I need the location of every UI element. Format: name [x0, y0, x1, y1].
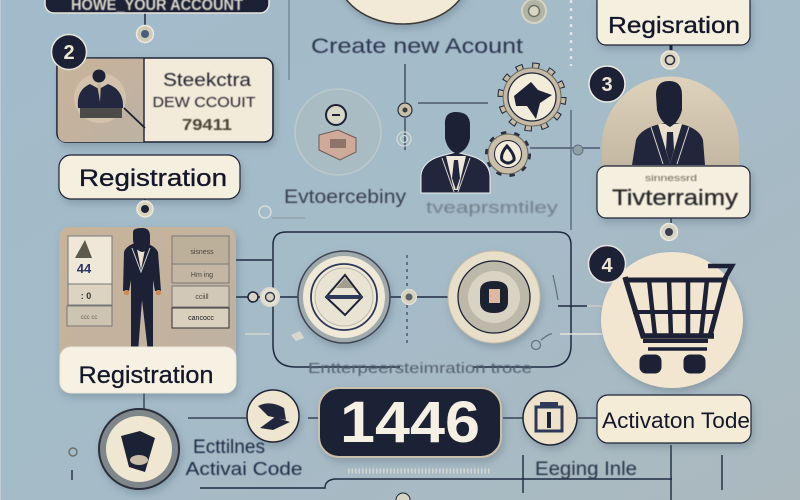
number badge 2: 2 — [63, 42, 75, 64]
icon: person at desk — [74, 70, 145, 128]
node: step 3 connector — [660, 224, 678, 240]
card text: DEW CCOUIT — [152, 94, 256, 111]
small outline node — [397, 132, 411, 146]
heading: create new account: Create new Acount — [311, 35, 523, 58]
icon: shopping cart — [625, 266, 732, 371]
card text — [152, 70, 256, 134]
icon: link nodes — [248, 288, 279, 306]
faint tick band — [348, 468, 490, 474]
number badge 3: 3 — [601, 74, 613, 96]
icon: lock round — [523, 391, 577, 445]
text: activation code left: Activai Code — [186, 459, 302, 479]
node: top connector — [136, 26, 154, 42]
panel: step 3 — [597, 77, 750, 218]
panel: step 2 card — [57, 58, 273, 142]
label: registration 1 — [59, 155, 240, 199]
icon: pin — [69, 448, 77, 456]
text: activation code left: Ecttilnes — [193, 437, 265, 458]
form cards right: cancocc — [188, 315, 214, 322]
icon: person — [632, 81, 705, 165]
label: registration 1: Registration — [79, 165, 227, 192]
card text: Steekctra — [163, 70, 252, 90]
person standing — [123, 228, 161, 352]
label: registration top right — [597, 0, 750, 45]
node: between badges — [402, 290, 416, 304]
form cards right — [172, 236, 229, 328]
person: centre — [421, 112, 490, 193]
label: registration — [60, 347, 236, 393]
text: begin file: Eeging Inle — [535, 459, 637, 480]
form cards left — [67, 236, 112, 326]
number badge 2 — [52, 34, 86, 70]
label: activation code: Activaton Tode — [602, 408, 750, 433]
faint label: enterprise: Evtoercebiny — [284, 187, 407, 208]
activation code number — [319, 388, 501, 457]
form cards right: cciill — [195, 294, 209, 301]
small key mark — [532, 275, 558, 350]
card text: 79411 — [182, 117, 232, 134]
number badge 3 — [589, 66, 625, 102]
panel: registration figure — [59, 227, 236, 393]
gear icon: large — [502, 67, 562, 127]
form cards left: ccc cc — [81, 315, 97, 321]
panel: registration figure: Registration — [78, 362, 214, 389]
faint gem mark — [291, 331, 304, 341]
faint key mark — [259, 206, 305, 218]
icon: large round badge — [99, 409, 179, 489]
form cards right: Hm ing — [191, 272, 213, 279]
label: registration top right: Regisration — [608, 12, 740, 38]
number badge 4 — [588, 246, 626, 282]
text: activation code left — [186, 437, 302, 479]
form cards left: 44 — [77, 261, 92, 276]
faint label: responsibility: tveaprsmtiley — [426, 198, 559, 217]
panel: step 3: Tivterraimy — [612, 185, 738, 210]
icon: circle handshake — [247, 390, 299, 442]
form cards right: sisness — [190, 249, 214, 256]
icon: lock badge — [448, 251, 540, 343]
gear icon: small — [488, 134, 528, 174]
node: right connector — [573, 145, 583, 155]
number badge 4: 4 — [601, 255, 613, 277]
activation code number: 1446 — [340, 390, 480, 455]
label: activation code — [597, 395, 751, 443]
top oval emblem — [337, 0, 469, 24]
left edge line — [0, 0, 1, 500]
node: top right — [522, 0, 546, 23]
caption: entry registration: Entterpeersteimration troce — [308, 360, 532, 377]
panel: step 3: sinnessrd — [645, 173, 697, 183]
icon: diamond badge — [298, 251, 390, 343]
node: below registration — [137, 201, 153, 217]
dotted drop lines — [406, 255, 408, 345]
node: top right connector — [661, 45, 679, 69]
panel: cart — [601, 252, 743, 388]
nodes around centre — [398, 103, 412, 117]
form cards left: : 0 — [81, 291, 91, 301]
node: bottom — [396, 493, 410, 500]
circle icon: money — [295, 89, 381, 175]
